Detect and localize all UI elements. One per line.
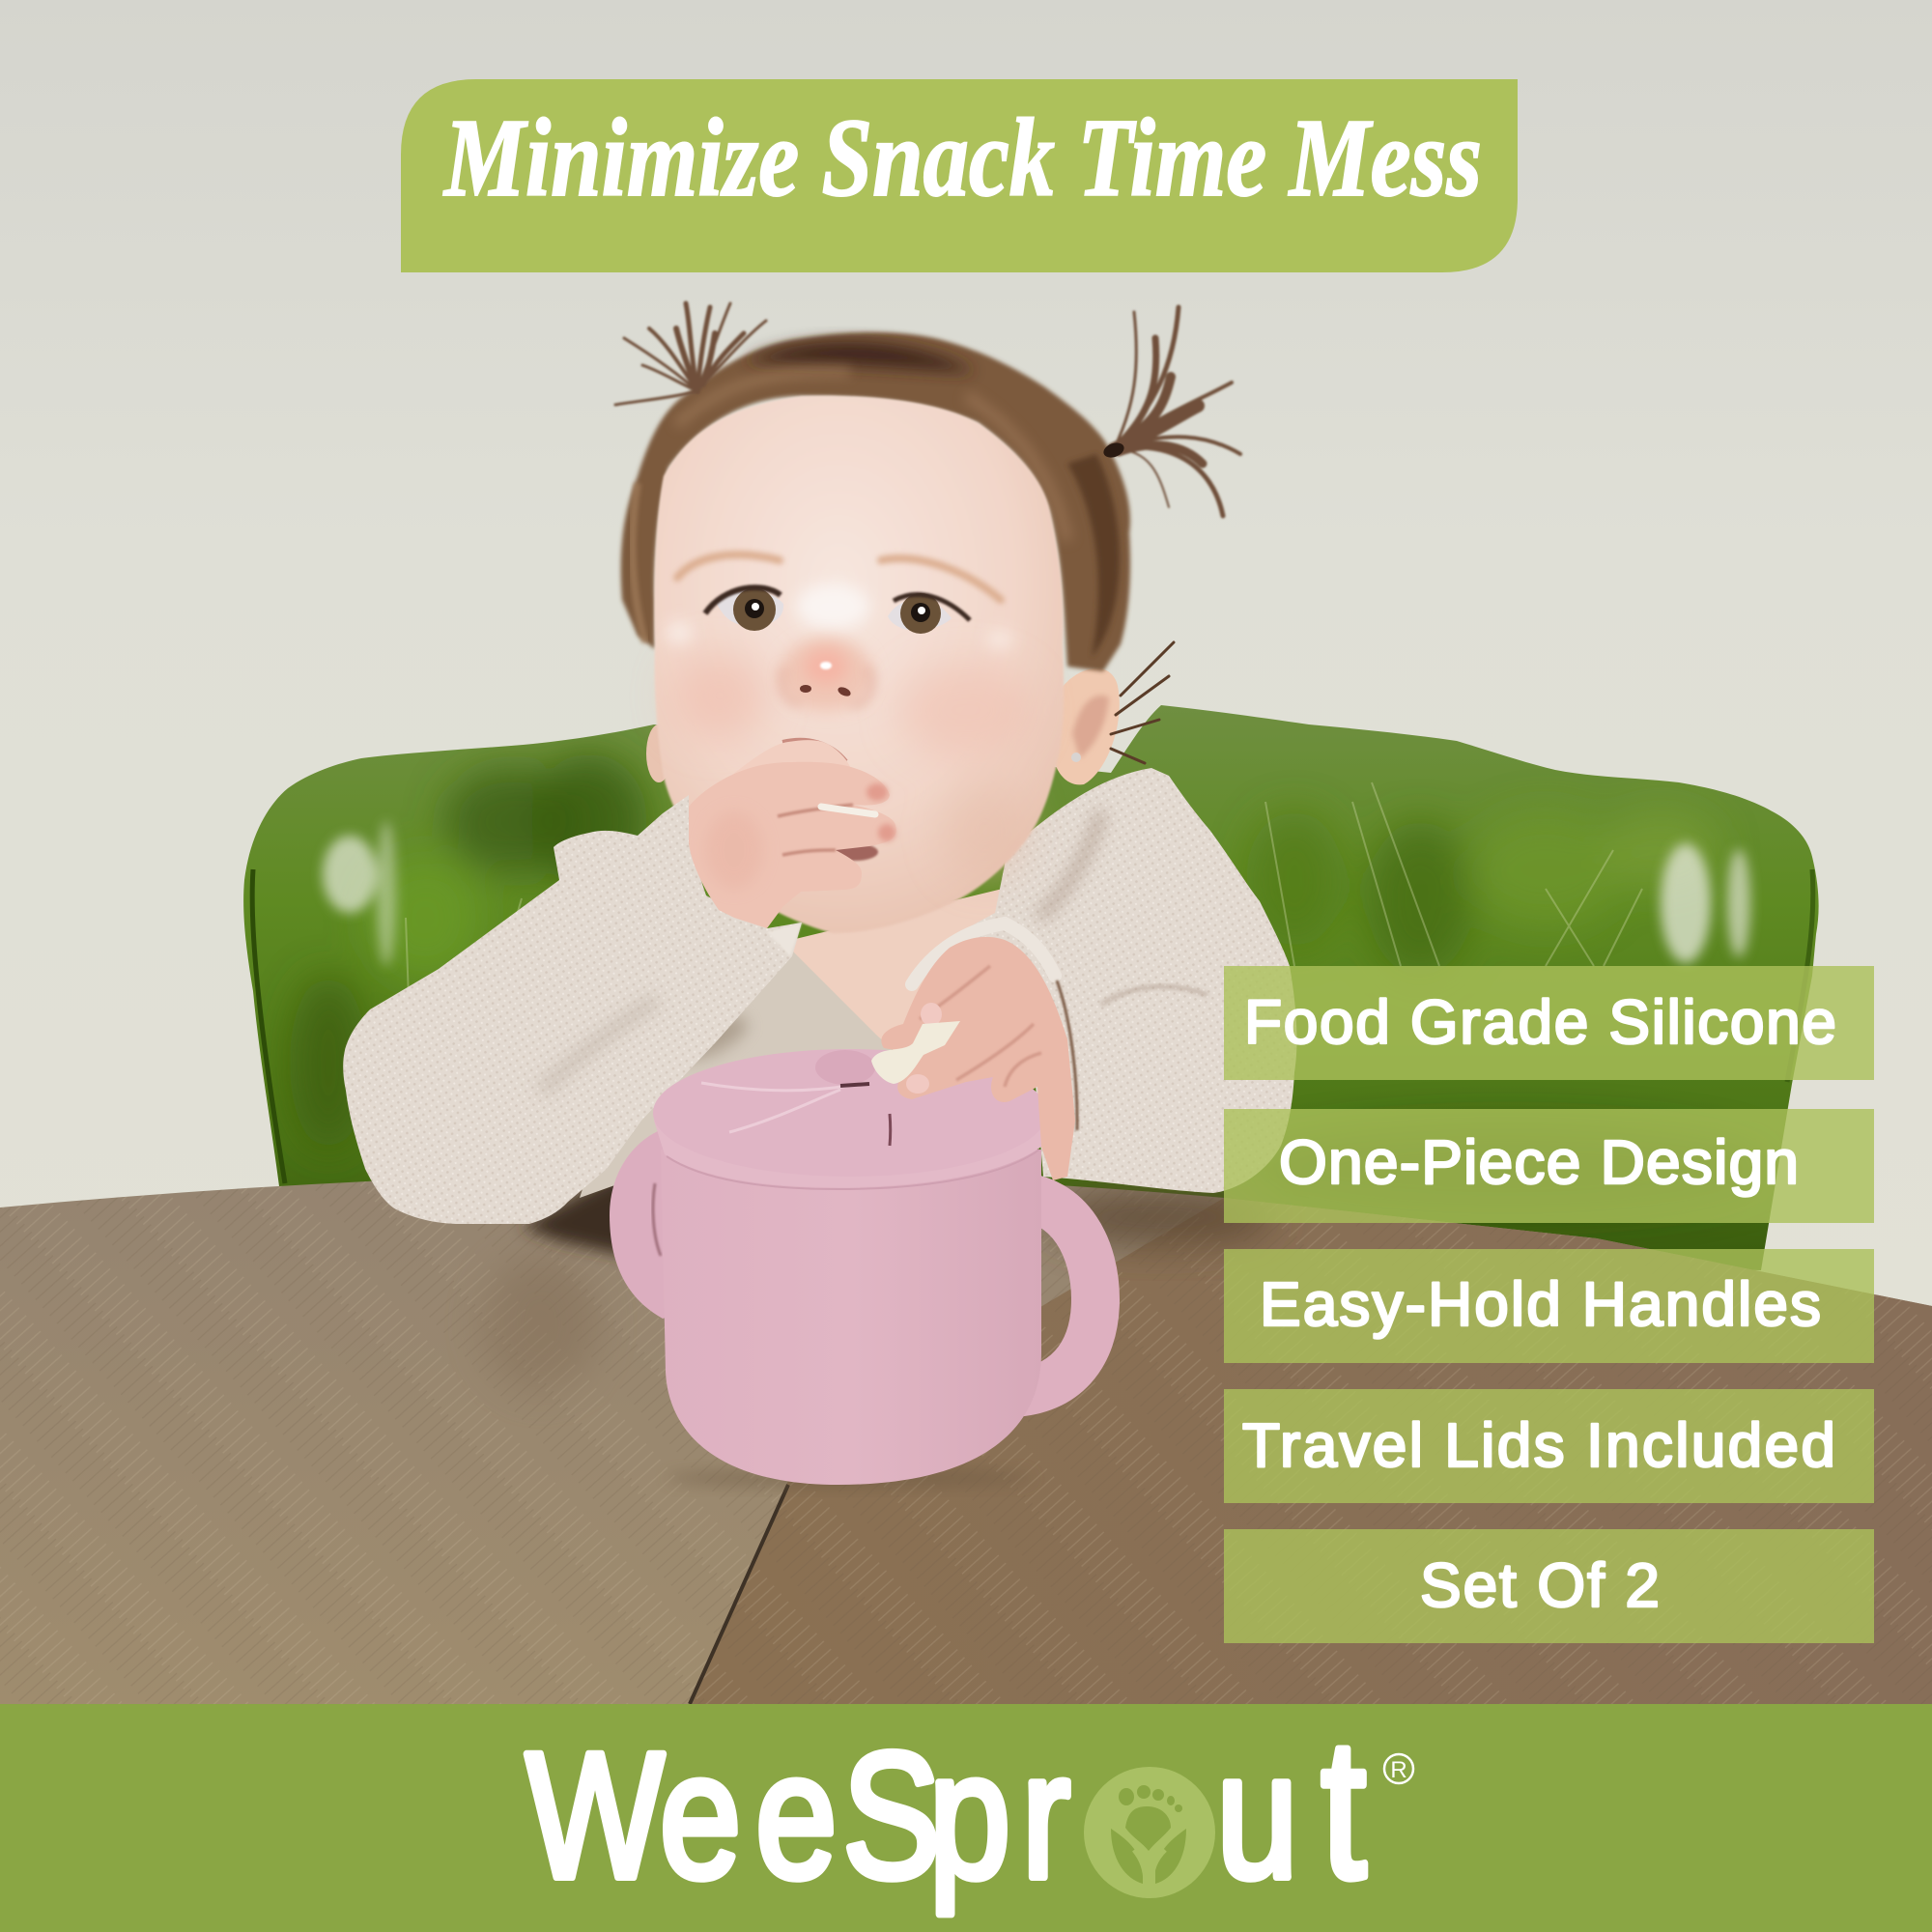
logo wordmark: t — [1321, 1697, 1366, 1919]
feature list — [1224, 966, 1874, 1643]
feature: easy-hold handles: Easy-Hold Handles — [1260, 1269, 1821, 1339]
feature: easy-hold handles — [1224, 1249, 1874, 1363]
left ear — [646, 724, 671, 782]
right handle — [1012, 1196, 1095, 1393]
lips — [782, 740, 846, 761]
hair tie — [1101, 440, 1126, 460]
right ear — [1053, 668, 1120, 784]
nape hair — [1111, 642, 1174, 763]
hand at mouth — [689, 740, 896, 928]
title text: Minimize Snack Time Mess — [442, 97, 1482, 220]
hair — [621, 332, 1130, 671]
cup body — [661, 1150, 1041, 1485]
feature: set of 2: Set Of 2 — [1420, 1550, 1660, 1620]
feature: set of 2 — [1224, 1529, 1874, 1643]
cheek blush — [671, 652, 1034, 879]
logo wordmark: o — [1092, 1716, 1173, 1915]
logo wordmark: WeeSpr — [526, 1716, 1070, 1915]
chest — [783, 887, 1014, 1072]
right eye — [888, 593, 970, 634]
sweater — [580, 768, 1296, 1198]
wall background — [0, 0, 1932, 1352]
nose — [780, 638, 872, 711]
left sleeve — [343, 795, 802, 1224]
left eye — [705, 587, 783, 631]
logo wordmark: u — [1216, 1716, 1298, 1915]
right plank — [690, 1198, 1932, 1710]
footer bar with logo — [0, 1697, 1932, 1932]
left pigtail — [615, 303, 766, 405]
feature: travel lids included: Travel Lids Included — [1242, 1410, 1835, 1480]
title banner — [401, 79, 1518, 272]
face — [654, 396, 1064, 933]
feature: food grade silicone — [1224, 966, 1874, 1080]
right shoulder and sleeve — [912, 768, 1296, 1193]
registered mark — [1384, 1754, 1413, 1783]
logo emblem: foot and sprout — [1084, 1767, 1215, 1898]
registered mark: R — [1390, 1757, 1407, 1783]
lower centre knit — [580, 942, 908, 1198]
hand on lid — [871, 937, 1075, 1180]
feature: food grade silicone: Food Grade Silicone — [1244, 987, 1836, 1057]
glare — [666, 583, 1013, 649]
lid — [653, 1049, 1047, 1189]
eyebrows — [677, 554, 1001, 600]
feature: one-piece design: One-Piece Design — [1279, 1127, 1799, 1197]
photo: baby with snack cup — [0, 299, 1932, 1704]
mouth shadow — [832, 843, 878, 861]
snack — [871, 1021, 960, 1084]
plank seam — [690, 1485, 788, 1704]
shadow under sleeve and cup — [522, 1174, 1034, 1488]
green leather chair — [232, 696, 1835, 1285]
left handle — [610, 1124, 676, 1319]
wooden table — [0, 1173, 1932, 1710]
thumb — [732, 740, 852, 787]
cuff — [912, 923, 1055, 984]
chair highlights — [323, 821, 1750, 966]
pink snack cup — [610, 1049, 1095, 1485]
feature: one-piece design — [1224, 1109, 1874, 1223]
feature: travel lids included — [1224, 1389, 1874, 1503]
baby head — [615, 303, 1240, 933]
right pigtail — [1114, 307, 1240, 516]
